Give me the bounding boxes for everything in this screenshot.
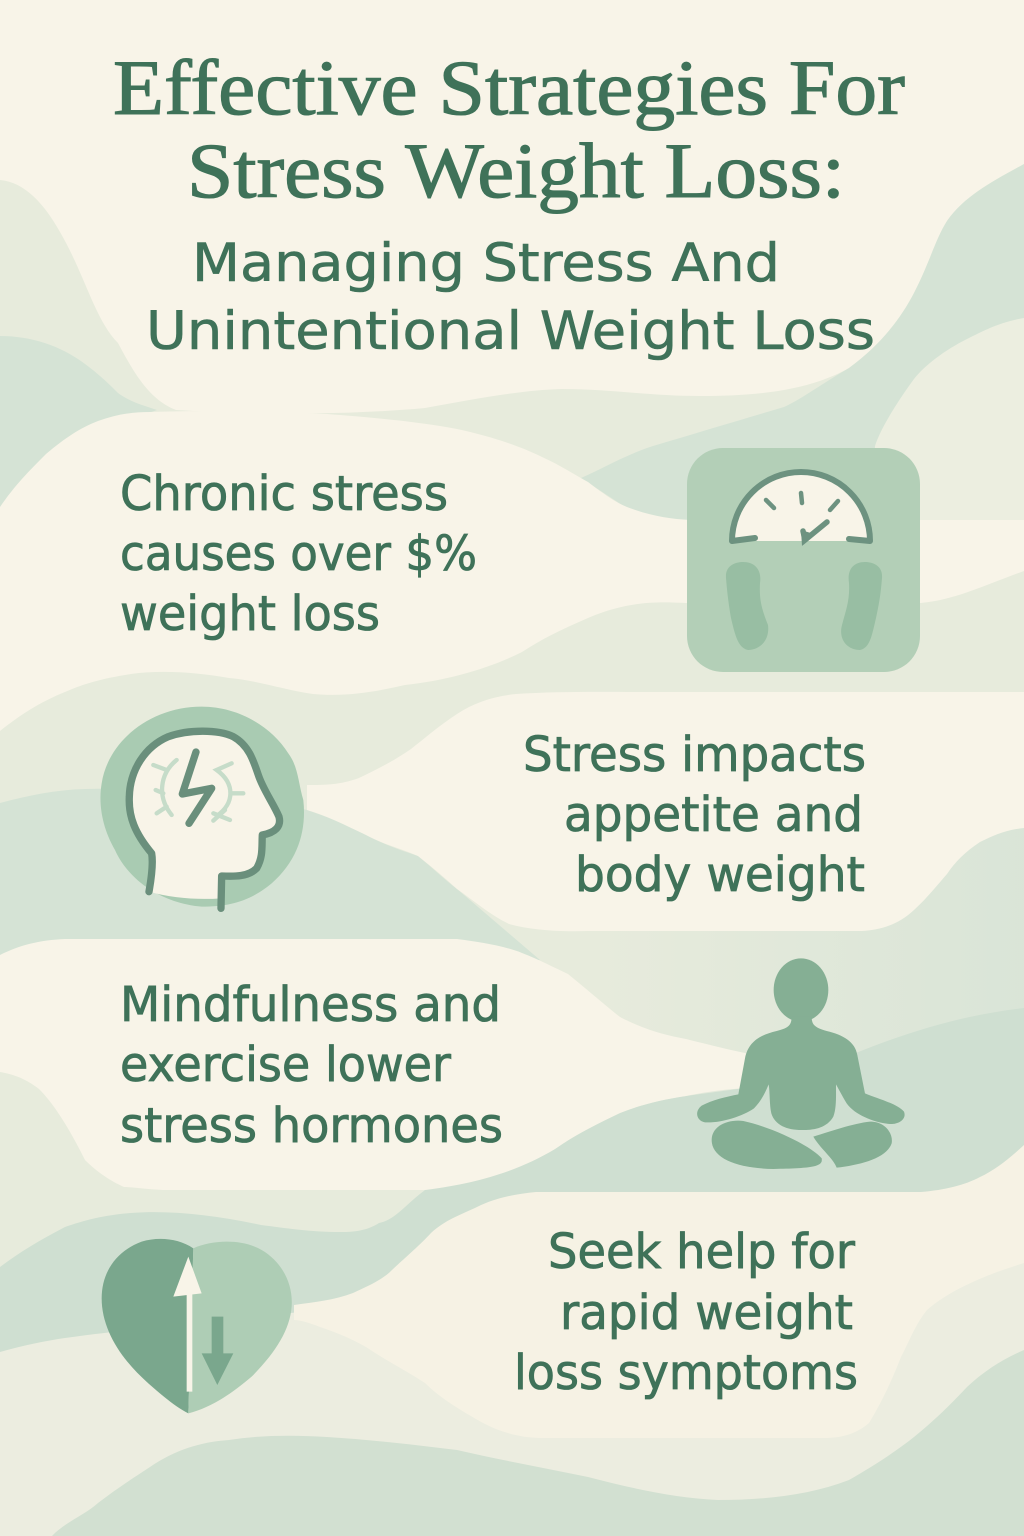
text block: seek help: loss symptoms: [514, 1345, 858, 1401]
subtitle: Managing Stress And: [192, 233, 780, 294]
icon: head with stress lightning: [100, 707, 304, 908]
cream ribbon 3: [0, 939, 760, 1190]
cream ribbon 1: [0, 411, 1024, 731]
text block: stress impacts: [523, 727, 866, 903]
title: Effective Strategies For: [113, 44, 905, 131]
text block: chronic stress: causes over $%: [120, 526, 477, 582]
subtitle: Unintentional Weight Loss: [146, 301, 875, 362]
cream ribbon 2: [307, 692, 1024, 931]
text block: chronic stress: weight loss: [120, 586, 380, 642]
icon: bathroom scale: [687, 448, 920, 672]
text block: stress impacts: appetite and: [564, 787, 863, 843]
title: Stress Weight Loss:: [187, 127, 845, 214]
title: [113, 44, 905, 214]
icon: meditating figure: [697, 958, 905, 1169]
icon: heart with up and down arrows: [102, 1239, 292, 1413]
text block: seek help: rapid weight: [560, 1285, 853, 1341]
text block: seek help: [514, 1224, 858, 1401]
text block: stress impacts: body weight: [575, 847, 865, 903]
subtitle: [146, 233, 875, 362]
text block: chronic stress: [120, 466, 477, 642]
text block: stress impacts: Stress impacts: [523, 727, 866, 783]
text block: mindfulness: stress hormones: [120, 1098, 503, 1154]
text block: mindfulness: Mindfulness and: [120, 977, 501, 1033]
cream ribbon 4: [294, 1145, 1024, 1438]
text block: chronic stress: Chronic stress: [120, 466, 448, 522]
text block: seek help: Seek help for: [548, 1224, 855, 1280]
text block: mindfulness: [120, 977, 503, 1154]
text block: mindfulness: exercise lower: [120, 1037, 451, 1093]
